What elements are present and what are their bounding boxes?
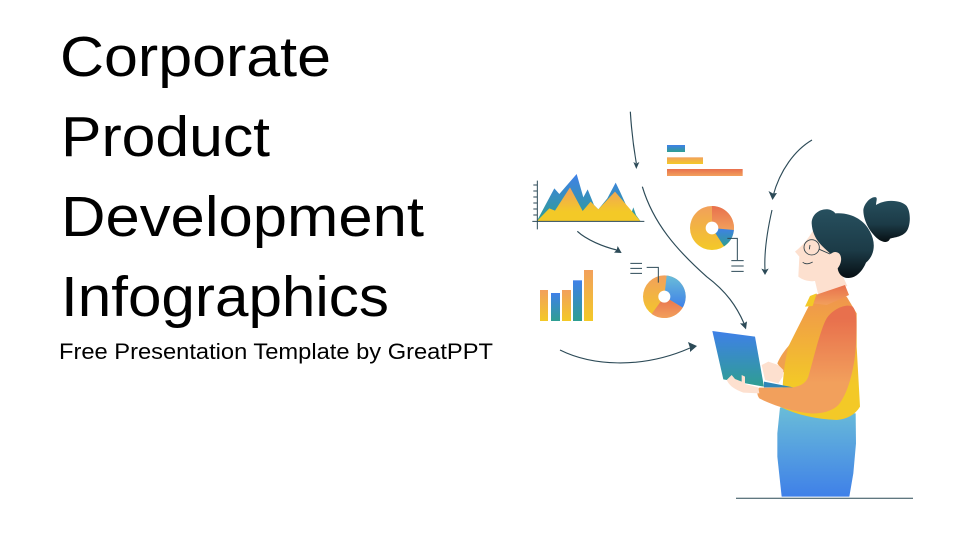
lower body and arms bbox=[777, 407, 856, 497]
head bbox=[795, 197, 910, 307]
laptop bbox=[712, 331, 793, 387]
upper body bbox=[712, 294, 860, 420]
donut chart: lower bbox=[630, 263, 686, 318]
right hand bbox=[762, 362, 783, 383]
ground line bbox=[736, 497, 913, 499]
subtitle: Free Presentation Template by GreatPPT bbox=[59, 339, 493, 364]
back arm bbox=[777, 345, 789, 377]
arrow: mountains to donut bbox=[577, 231, 622, 253]
trousers bbox=[777, 407, 856, 497]
title bbox=[60, 25, 424, 329]
torso bbox=[780, 294, 860, 420]
arrow: bottom to laptop bbox=[560, 342, 697, 363]
donut chart: upper bbox=[690, 206, 744, 271]
collar bbox=[813, 285, 849, 305]
title: Corporate bbox=[60, 25, 331, 89]
arrow: long curve to laptop bbox=[642, 187, 747, 329]
area chart: mountains bbox=[532, 174, 644, 229]
hair bbox=[812, 209, 874, 278]
glasses bbox=[804, 240, 830, 255]
arrow: right down bbox=[761, 210, 772, 275]
person with laptop bbox=[712, 197, 910, 497]
ear bbox=[830, 253, 842, 265]
title: Product bbox=[61, 105, 270, 169]
bun bbox=[863, 197, 910, 242]
arrow: top centre bbox=[630, 112, 639, 169]
left hand bbox=[727, 375, 759, 393]
collar tip bbox=[805, 293, 817, 307]
title: Infographics bbox=[61, 265, 389, 329]
horizontal bar chart bbox=[667, 145, 743, 176]
neck and face bbox=[795, 230, 850, 295]
charts and arrows bbox=[532, 112, 747, 329]
eye and smile bbox=[803, 245, 813, 264]
title: Development bbox=[61, 185, 424, 249]
sleeve bbox=[757, 306, 856, 413]
vertical bar chart bbox=[540, 270, 593, 321]
arrow: upper right bbox=[768, 140, 812, 200]
